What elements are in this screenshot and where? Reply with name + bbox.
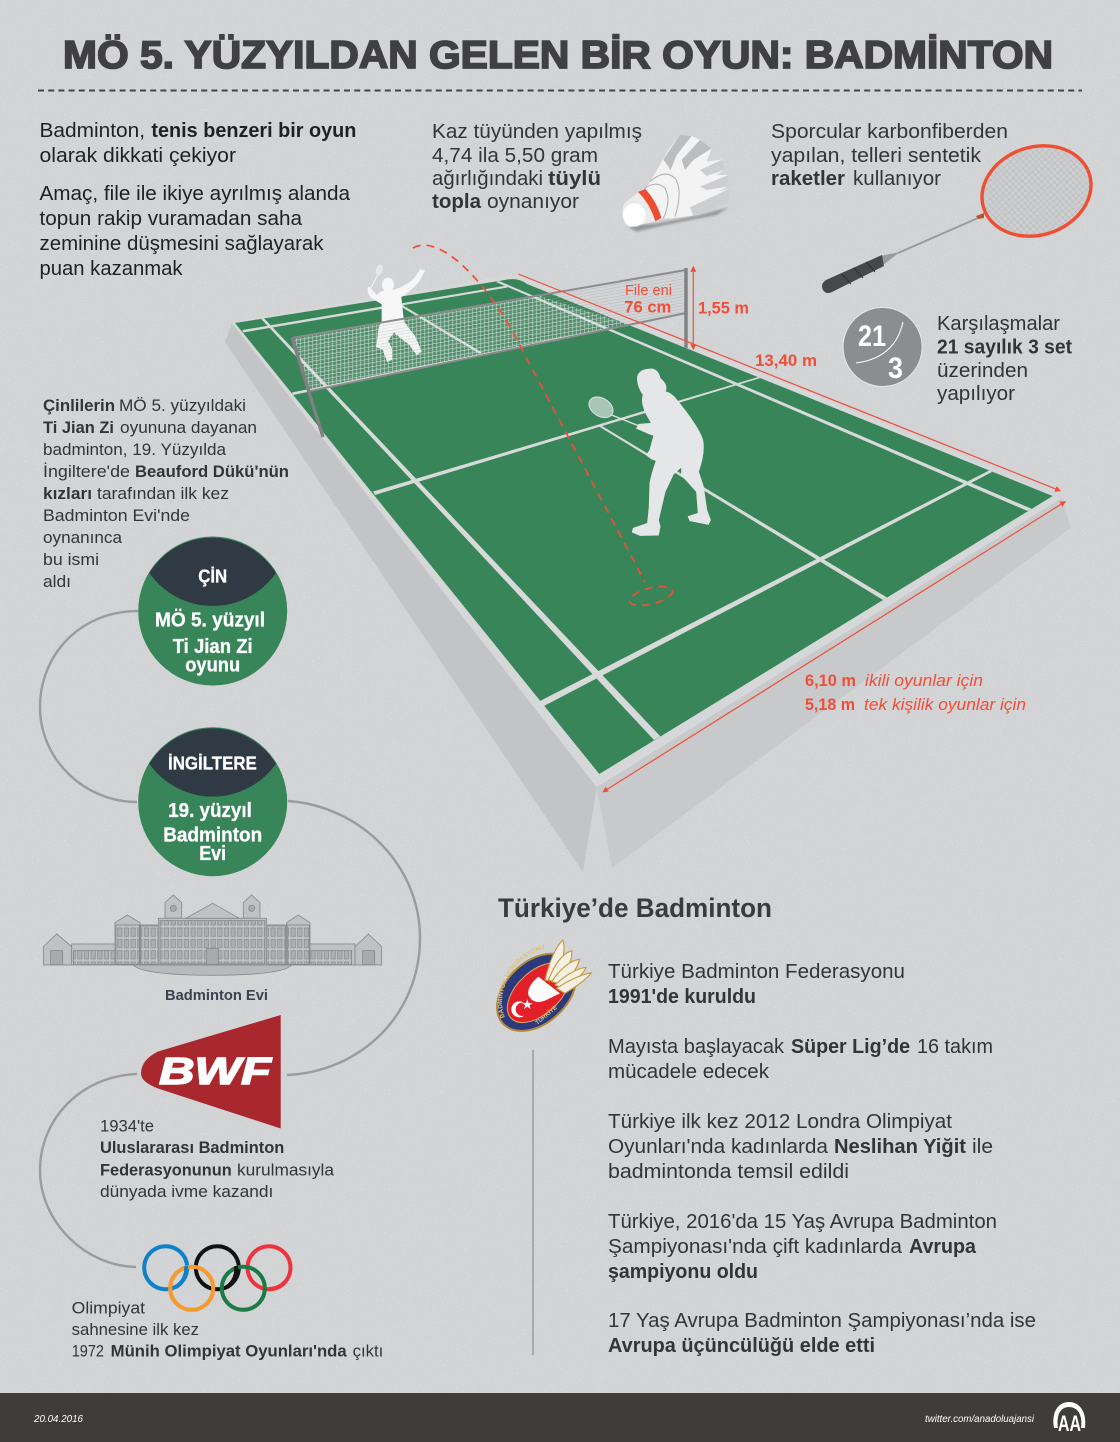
Türkiye fact: Süper Lig: Süper Lig’de xyxy=(791,1036,910,1058)
Türkiye fact: federation: Türkiye Badminton Federasyonu xyxy=(608,961,905,983)
icon: Olympic rings xyxy=(144,1246,290,1310)
icon: AA logo: AA xyxy=(1058,1411,1081,1436)
icon: 21/3 score circle: 21 xyxy=(858,320,886,353)
intro text: zeminine düşmesini sağlayarak xyxy=(40,233,325,255)
icon: 21/3 score circle: 3 xyxy=(888,352,903,385)
Olympics text: 1972 xyxy=(72,1343,104,1361)
shuttle trajectory dashed xyxy=(413,245,674,609)
racket text xyxy=(771,121,1008,190)
icon: BWF logo: BWF xyxy=(159,1051,273,1093)
icon: Türkiye Badminton Federasyonu emblem xyxy=(496,939,592,1032)
racket text: kullanıyor xyxy=(853,168,941,190)
timeline node: İngiltere: 19. yüzyıl xyxy=(168,800,252,822)
timeline node: Çin xyxy=(138,536,287,686)
Türkiye fact: London 2012: badmintonda temsil edildi xyxy=(608,1161,849,1183)
score text: 21 sayılık 3 set xyxy=(937,336,1072,358)
Olympics text: Olimpiyat xyxy=(72,1299,145,1317)
Olympics text: Münih Olimpiyat Oyunları'nda xyxy=(111,1343,348,1361)
icon: Türkiye Badminton Federasyonu emblem: BADMİNTON FEDERASYONU xyxy=(496,944,544,1018)
Türkiye fact: U17 European third xyxy=(608,1310,1036,1357)
history text: bu ismi xyxy=(43,551,99,569)
score text xyxy=(937,313,1072,405)
far player silhouette xyxy=(368,264,424,361)
icon: racket xyxy=(822,132,1103,293)
net height label: 1,55 m xyxy=(698,298,749,317)
Türkiye fact: U15 European champion xyxy=(608,1211,997,1283)
history text: Badminton Evi'nde xyxy=(43,507,190,525)
net width label xyxy=(624,282,672,317)
Türkiye fact: Süper Lig: 16 takım xyxy=(917,1036,993,1058)
score text: Karşılaşmalar xyxy=(937,313,1060,335)
Olympics text: sahnesine ilk kez xyxy=(72,1321,199,1339)
racket text: raketler xyxy=(771,168,845,190)
timeline node: İngiltere: İNGİLTERE xyxy=(168,753,257,773)
shuttlecock text xyxy=(432,121,642,213)
Türkiye fact: Süper Lig: mücadele edecek xyxy=(608,1061,770,1083)
main player silhouette xyxy=(585,369,710,535)
Türkiye fact: federation: 1991'de kuruldu xyxy=(608,986,756,1008)
Türkiye fact: London 2012 xyxy=(608,1111,993,1183)
Olympics text xyxy=(72,1299,383,1361)
icon: Badminton Evi building xyxy=(43,895,382,975)
history text: aldı xyxy=(43,573,71,591)
shuttlecock text: oynanıyor xyxy=(487,191,579,213)
net xyxy=(292,268,686,437)
court width labels: ikili oyunlar için xyxy=(865,671,983,690)
history text xyxy=(43,397,289,591)
Türkiye fact: London 2012: Neslihan Yiğit xyxy=(834,1136,966,1158)
intro text: Amaç, file ile ikiye ayrılmış alanda xyxy=(40,183,351,205)
title: MÖ 5. YÜZYILDAN GELEN BİR OYUN: BADMİNTON xyxy=(63,34,1053,77)
BWF text: kurulmasıyla xyxy=(237,1162,335,1180)
net width label: File eni xyxy=(625,282,672,299)
court width labels: 5,18 m xyxy=(805,695,855,714)
Türkiye fact: London 2012: Türkiye ilk kez 2012 Londra Olimpiyat xyxy=(608,1111,952,1133)
court width labels: 6,10 m xyxy=(805,671,856,690)
timeline node: İngiltere: Badminton xyxy=(163,825,262,847)
Türkiye fact: London 2012: ile xyxy=(972,1136,993,1158)
icon: 21/3 score circle xyxy=(843,308,922,386)
racket text: yapılan, telleri sentetik xyxy=(771,145,982,167)
heading: Türkiye'de Badminton: Türkiye’de Badminton xyxy=(498,893,772,923)
court platform xyxy=(225,275,1071,872)
Türkiye fact: federation xyxy=(608,961,905,1008)
racket text: Sporcular karbonfiberden xyxy=(771,121,1008,143)
intro text: topun rakip vuramadan saha xyxy=(40,208,303,230)
court width labels: tek kişilik oyunlar için xyxy=(864,695,1026,714)
court length label: 13,40 m xyxy=(755,351,817,370)
building caption: Badminton Evi xyxy=(165,987,268,1004)
Türkiye fact: U17 European third: 17 Yaş Avrupa Badminton Şampiyonası’nda ise xyxy=(608,1310,1036,1332)
history text: Çinlilerin xyxy=(43,397,115,415)
shuttlecock text: ağırlığındaki xyxy=(432,168,543,190)
Türkiye fact: U15 European champion: şampiyonu oldu xyxy=(608,1261,758,1283)
Türkiye fact: Süper Lig: Mayısta başlayacak xyxy=(608,1036,785,1058)
intro text xyxy=(40,120,356,280)
Olympics text: çıktı xyxy=(353,1343,383,1361)
history text: kızları xyxy=(43,485,92,503)
shuttlecock text: tüylü xyxy=(548,168,601,190)
BWF text xyxy=(100,1118,335,1201)
BWF text: Federasyonunun xyxy=(100,1162,232,1180)
shuttlecock text: topla xyxy=(432,191,482,213)
dimension lines xyxy=(518,267,1065,792)
timeline node: Çin: ÇİN xyxy=(198,567,227,587)
green playing surface xyxy=(235,279,1053,774)
Türkiye fact: U17 European third: Avrupa üçüncülüğü elde etti xyxy=(608,1335,875,1357)
intro text: olarak dikkati çekiyor xyxy=(40,145,236,167)
icon: shuttlecock xyxy=(623,135,730,232)
intro text: Badminton, xyxy=(40,120,145,142)
timeline node: İngiltere xyxy=(138,727,287,876)
BWF text: dünyada ivme kazandı xyxy=(100,1183,273,1201)
BWF text: Uluslararası Badminton xyxy=(100,1139,284,1157)
Türkiye fact: U15 European champion: Şampiyonası'nda çift kadınlarda xyxy=(608,1236,903,1258)
timeline node: İngiltere: Evi xyxy=(199,843,226,865)
history text: MÖ 5. yüzyıldaki xyxy=(119,397,246,415)
timeline node: Çin: oyunu xyxy=(185,655,240,677)
Türkiye fact: U15 European champion: Türkiye, 2016'da 15 Yaş Avrupa Badminton xyxy=(608,1211,997,1233)
intro text: puan kazanmak xyxy=(40,258,184,280)
footer bar xyxy=(0,1393,1120,1442)
player racket xyxy=(585,393,638,426)
court width labels xyxy=(805,671,1026,714)
court lines xyxy=(242,281,1032,740)
history text: Ti Jian Zi xyxy=(43,419,114,437)
score text: üzerinden xyxy=(937,360,1028,382)
platform left wall xyxy=(225,323,597,872)
timeline node: Çin: MÖ 5. yüzyıl xyxy=(155,609,265,632)
BWF text: 1934'te xyxy=(100,1118,154,1136)
Türkiye fact: London 2012: Oyunları'nda kadınlarda xyxy=(608,1136,829,1158)
intro text: tenis benzeri bir oyun xyxy=(151,120,356,142)
history text: Beauford Dükü'nün xyxy=(135,463,289,481)
icon: AA logo xyxy=(1053,1402,1085,1436)
score text: yapılıyor xyxy=(937,383,1015,405)
shuttlecock text: 4,74 ila 5,50 gram xyxy=(432,145,598,167)
platform right wall xyxy=(597,498,1071,868)
history text: badminton, 19. Yüzyılda xyxy=(43,441,227,459)
history text: oynanınca xyxy=(43,529,123,547)
timeline node: Çin: Ti Jian Zi xyxy=(173,636,253,658)
timeline connector curves xyxy=(40,611,420,1267)
icon: BWF logo xyxy=(141,1015,281,1128)
history text: İngiltere'de xyxy=(43,462,130,481)
Türkiye fact: Süper Lig xyxy=(608,1036,993,1083)
net width label: 76 cm xyxy=(624,298,671,317)
Türkiye fact: U15 European champion: Avrupa xyxy=(909,1236,977,1258)
history text: tarafından ilk kez xyxy=(97,485,229,503)
history text: oyununa dayanan xyxy=(120,419,257,437)
footer source: twitter.com/anadoluajansi xyxy=(925,1413,1035,1425)
icon: Türkiye Badminton Federasyonu emblem: TÜRKİYE xyxy=(534,1004,559,1027)
footer date: 20.04.2016 xyxy=(33,1414,83,1425)
shuttlecock text: Kaz tüyünden yapılmış xyxy=(432,121,642,143)
